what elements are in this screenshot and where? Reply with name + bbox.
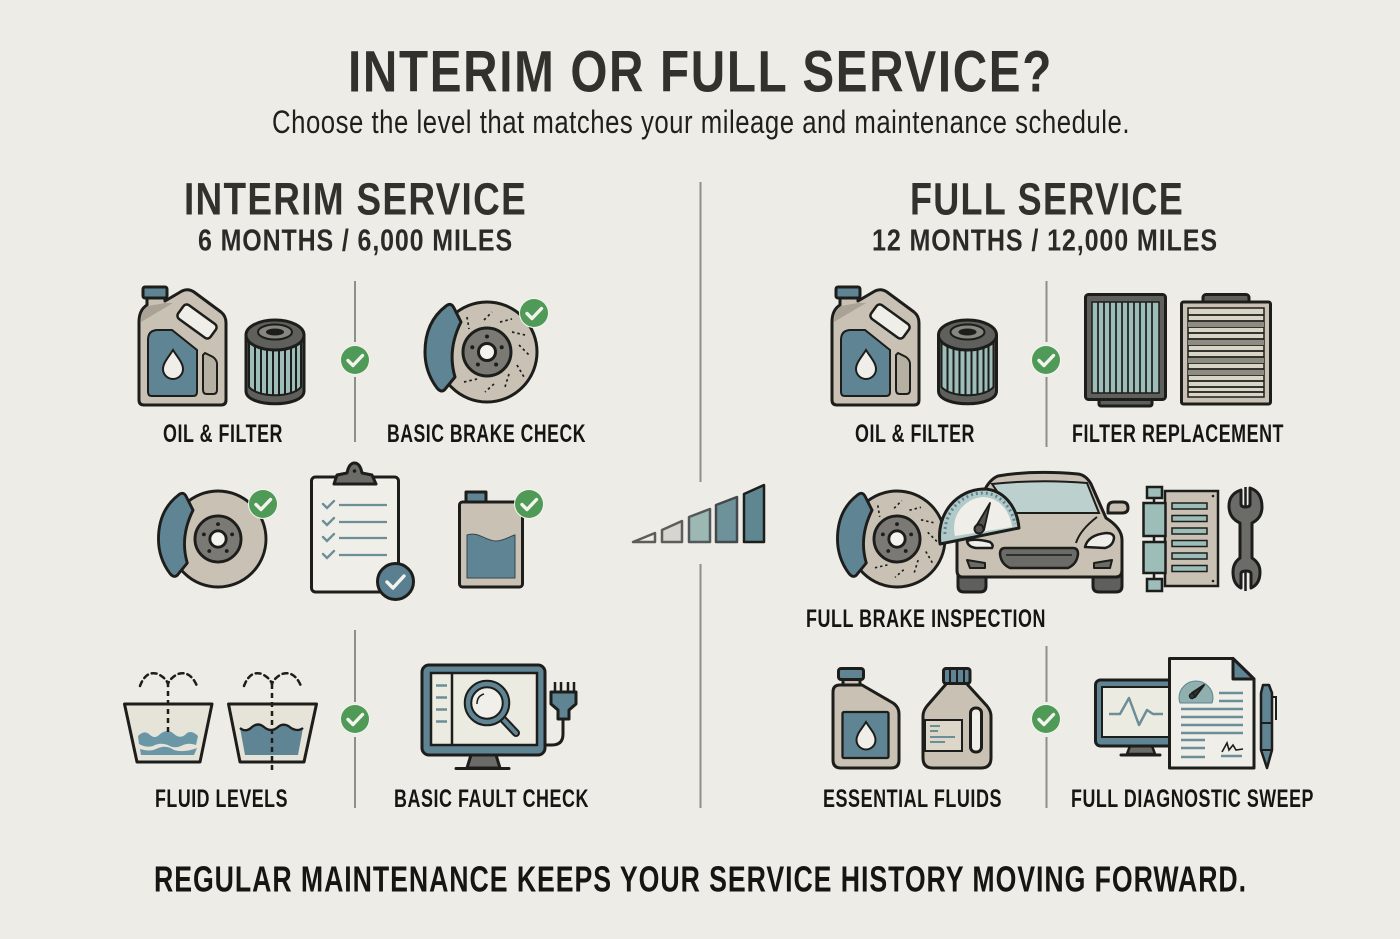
icon: clipboard checklist — [312, 463, 414, 600]
subtitle: Choose the level that matches your mileage and maintenance schedule. — [272, 104, 1130, 140]
icon: plain brake disc — [158, 491, 266, 587]
check badge — [1031, 345, 1061, 375]
icon: cabin filter — [1182, 294, 1270, 404]
icon: speedometer gauge — [940, 489, 1019, 544]
icon: labelled fluid bottle — [923, 668, 991, 768]
panel: full service — [806, 174, 1314, 813]
icon: oil jug — [832, 287, 919, 405]
icon: car front — [957, 472, 1128, 592]
check badge — [340, 704, 370, 734]
heading: full service: FULL SERVICE — [910, 174, 1184, 224]
icon: air filter — [1086, 294, 1166, 406]
title: INTERIM OR FULL SERVICE? — [348, 40, 1053, 104]
center divider — [700, 182, 702, 808]
label: full brake inspection: FULL BRAKE INSPECTION — [806, 605, 1046, 633]
icon: control module — [1144, 487, 1218, 591]
icon: oil filter — [938, 320, 996, 404]
interval: 12 months: 12 MONTHS / 12,000 MILES — [872, 222, 1218, 258]
icon: pen — [1261, 685, 1276, 768]
icon: diagnostic report — [1170, 658, 1254, 768]
progress bars icon — [633, 485, 764, 542]
icon: fluid level reservoirs — [124, 673, 316, 770]
icon: diagnostic monitor — [1096, 680, 1176, 755]
check badge — [248, 489, 278, 519]
label: basic brake check: BASIC BRAKE CHECK — [387, 420, 586, 448]
icon: drilled brake disc — [425, 302, 537, 402]
check badge — [514, 489, 544, 519]
icon: essential fluid bottle — [833, 668, 899, 768]
icon: drilled brake disc — [837, 491, 945, 587]
icon: wrench — [1229, 487, 1262, 591]
label: fluid levels: FLUID LEVELS — [155, 785, 288, 813]
check badge — [340, 345, 370, 375]
interval: 6 months: 6 MONTHS / 6,000 MILES — [198, 222, 513, 258]
heading: interim service: INTERIM SERVICE — [184, 174, 527, 224]
label: oil and filter: OIL & FILTER — [163, 420, 283, 448]
label: basic fault check: BASIC FAULT CHECK — [394, 785, 589, 813]
icon: oil filter — [246, 320, 304, 404]
check badge — [519, 298, 549, 328]
label: oil and filter: OIL & FILTER — [855, 420, 975, 448]
panel: interim service — [124, 174, 589, 813]
label: essential fluids: ESSENTIAL FLUIDS — [823, 785, 1002, 813]
check badge — [1031, 704, 1061, 734]
label: filter replacement: FILTER REPLACEMENT — [1072, 420, 1284, 448]
icon: fluid container — [460, 492, 522, 587]
icon: scan monitor — [422, 665, 576, 768]
column dividers — [354, 281, 356, 808]
icon: oil jug — [139, 287, 226, 405]
column dividers — [1046, 281, 1048, 808]
